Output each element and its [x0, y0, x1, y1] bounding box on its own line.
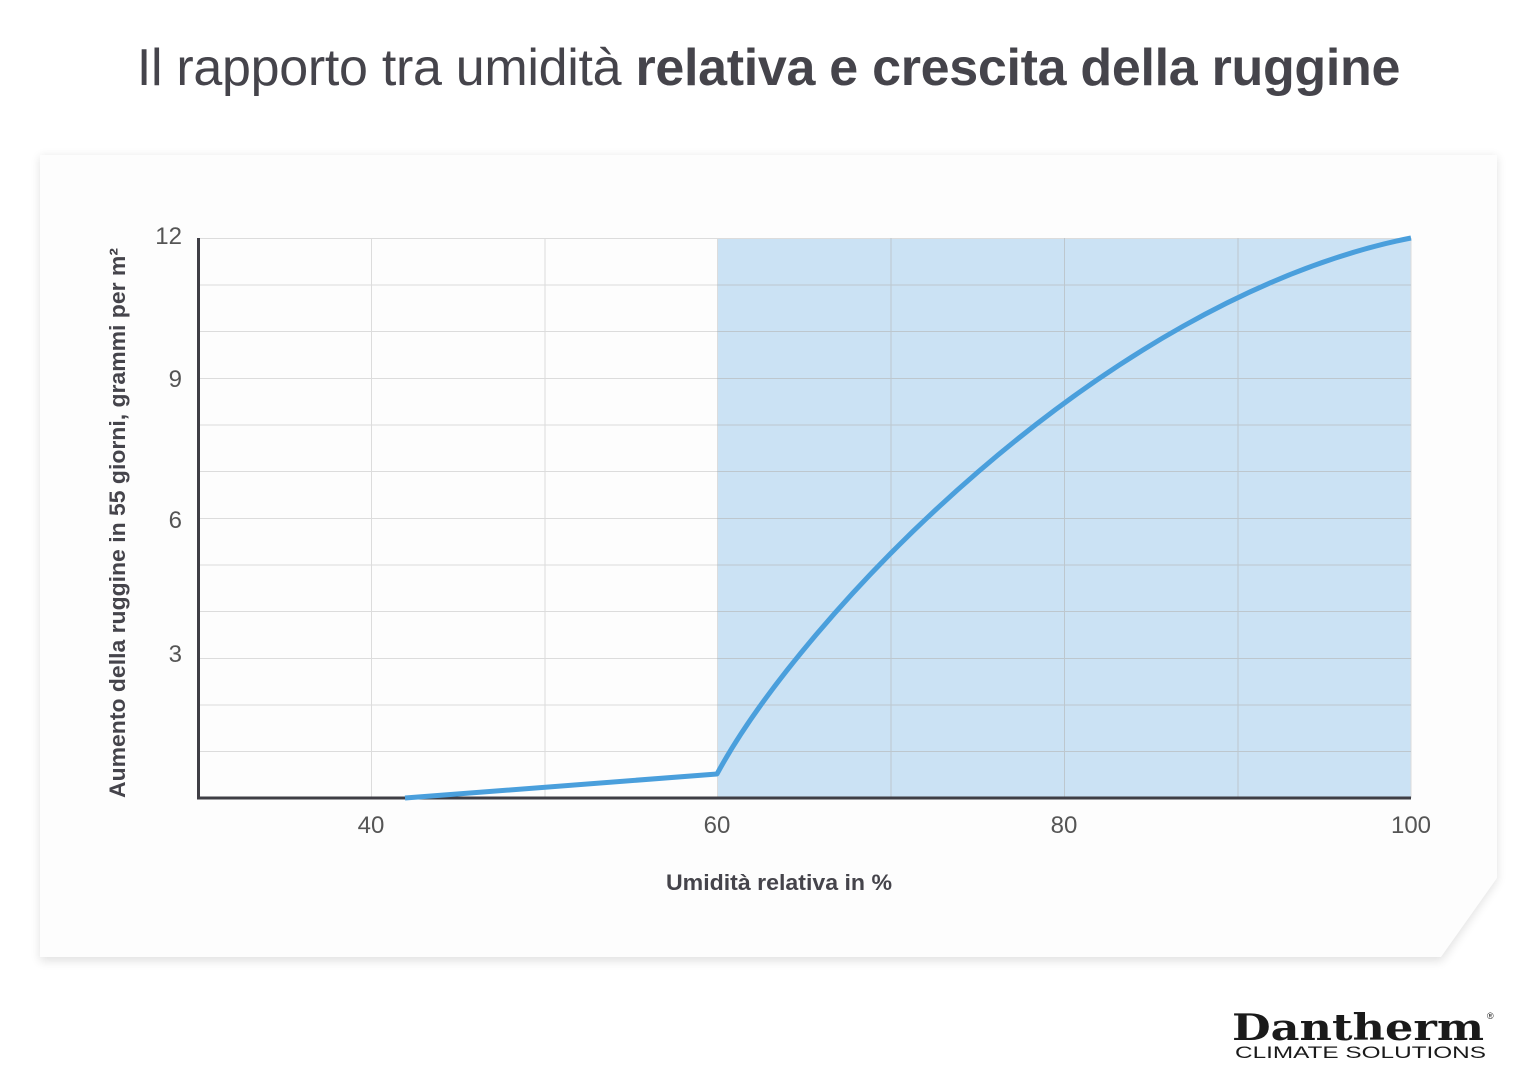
x tick labels: 40	[358, 812, 384, 839]
y tick labels: 3	[169, 641, 182, 668]
y axis title: Aumento della ruggine in 55 giorni, grammi per m²	[105, 248, 130, 798]
x tick labels	[358, 812, 1431, 839]
shaded region 60-100%	[717, 238, 1411, 798]
x tick labels: 80	[1051, 812, 1077, 839]
logo: Dantherm: Dantherm	[1232, 1007, 1484, 1049]
x tick labels: 100	[1391, 812, 1431, 839]
y tick labels: 12	[155, 223, 182, 250]
logo: Dantherm: CLIMATE SOLUTIONS	[1235, 1043, 1486, 1062]
y tick labels	[155, 223, 182, 668]
axes	[197, 238, 200, 799]
logo: Dantherm	[1232, 1007, 1494, 1062]
x axis title: Umidità relativa in %	[666, 870, 892, 895]
x tick labels: 60	[704, 812, 730, 839]
title: Il rapporto tra umidità relativa e crescita della ruggine	[137, 39, 1400, 97]
logo: Dantherm: ®	[1487, 1011, 1494, 1021]
curve	[405, 238, 1411, 798]
chart	[105, 223, 1431, 895]
y tick labels: 9	[169, 366, 182, 393]
y tick labels: 6	[169, 507, 182, 534]
